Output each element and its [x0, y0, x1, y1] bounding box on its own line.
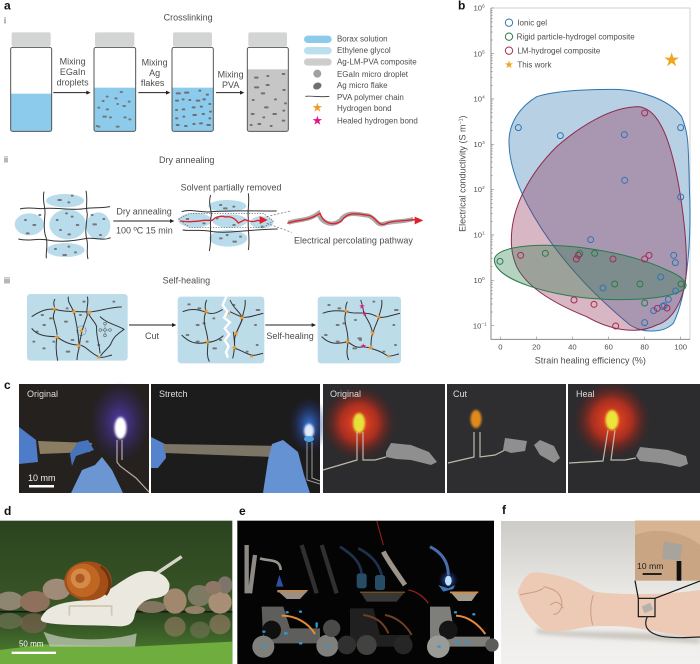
star: this work: [664, 52, 679, 66]
robot main with lit LED: [427, 547, 499, 658]
scale bar 50 mm: 50 mm: [19, 640, 44, 649]
y axis tick labels: 5: [482, 49, 485, 54]
region: ionic gel: [509, 89, 690, 331]
snail shell: [64, 561, 112, 601]
heading: Self-healing: Self-healing: [163, 276, 210, 286]
y axis tick labels: −1: [481, 321, 487, 326]
chart legend: LM-hydrogel composite: [517, 47, 601, 56]
annealed network diagram: [178, 193, 292, 251]
label: heal: Heal: [576, 389, 595, 399]
text: solvent partially removed: Solvent partially removed: [181, 182, 282, 192]
legend: [304, 35, 418, 126]
arrow: self-healing: [265, 323, 316, 341]
inset photo: [635, 521, 700, 581]
sub-label i: i: [4, 15, 6, 25]
y axis title: ): [457, 115, 467, 118]
y axis tick labels: 10: [474, 140, 482, 149]
panel: c photo heal: [568, 380, 700, 493]
chart legend: [505, 19, 635, 70]
arrow and label: mixing EGaIn droplets: EGaIn: [60, 67, 85, 77]
region: LM-hydrogel composite: [511, 107, 686, 330]
arrow and label: mixing PVA: [216, 69, 244, 95]
panel label e: e: [239, 504, 246, 518]
heading: Crosslinking: Crosslinking: [164, 13, 213, 23]
arrow and label: mixing PVA: PVA: [222, 80, 239, 90]
snail antenna: [157, 557, 182, 573]
chart legend: Ionic gel: [517, 19, 547, 28]
snail body: [41, 571, 169, 626]
x axis tick labels: 0: [498, 342, 502, 351]
y axis tick labels: 10: [474, 231, 482, 240]
panel: a-i crosslinking: [4, 13, 418, 131]
chart legend: This work: [517, 61, 552, 70]
data points: LM-hydrogel composite: [518, 110, 670, 329]
robot ghost 1: [247, 545, 340, 658]
inset photo: 10 mm: [637, 561, 663, 571]
x axis tick labels: 20: [532, 342, 541, 351]
y axis tick labels: 1: [482, 231, 485, 236]
arrow and label: mixing Ag flakes: Ag: [149, 68, 160, 78]
arrow: dry annealing 100 °C 15 min: [113, 207, 174, 235]
panel: c photo original red: [321, 384, 445, 493]
x axis tick labels: [498, 342, 687, 351]
arrow and label: mixing Ag flakes: flakes: [141, 78, 165, 88]
y axis tick labels: [473, 4, 487, 330]
panel: c photo stretch blue: [151, 384, 329, 493]
arrow: cut: [129, 323, 176, 341]
y axis tick labels: 4: [482, 95, 485, 100]
panel label d: d: [4, 504, 11, 518]
label: cut: Cut: [453, 389, 468, 399]
y axis tick labels: 10: [474, 185, 482, 194]
data points: ionic gel: [515, 125, 684, 326]
arrow and label: mixing PVA: Mixing: [218, 69, 244, 79]
panel: b scatter chart: [457, 4, 690, 366]
y axis tick labels: 10: [474, 95, 482, 104]
robot ghosts 2 and 3: [302, 545, 413, 655]
panel label f: f: [502, 503, 507, 517]
y axis tick labels: 10: [474, 276, 482, 285]
y axis tick labels: 6: [482, 4, 485, 9]
arrow: dry annealing 100 °C 15 min: Dry annealing: [116, 207, 172, 217]
panel: f wrist photo: [501, 521, 700, 664]
vial 3 with droplets and flakes: [172, 32, 213, 131]
grass background: [0, 521, 232, 664]
x axis tick labels: 40: [568, 342, 577, 351]
arrow: cut: Cut: [145, 331, 159, 341]
arrow and label: mixing EGaIn droplets: droplets: [57, 77, 89, 87]
panel label c: c: [4, 378, 11, 392]
legend: composite: Ag-LM-PVA composite: [337, 57, 417, 66]
text: electrical percolating pathway: Electrical percolating pathway: [294, 236, 413, 246]
vial 1 borax: [11, 32, 52, 131]
label: original: Original: [330, 389, 361, 399]
hydrogel panel cut: [178, 296, 264, 363]
legend: borax solution: Borax solution: [337, 35, 388, 44]
x axis title: Strain healing efficiency (%): [535, 356, 646, 366]
y axis tick labels: 10: [474, 4, 482, 13]
x axis tick labels: 80: [640, 342, 649, 351]
strip on snail: [69, 606, 112, 616]
arrow and label: mixing Ag flakes: [138, 57, 170, 95]
zoom box and lines: [635, 581, 700, 617]
legend: ethylene glycol: Ethylene glycol: [337, 46, 391, 55]
scale bar 10 mm: 10 mm: [28, 473, 56, 483]
sub-label ii: ii: [4, 155, 8, 165]
rocks: [0, 576, 232, 638]
chart legend: Rigid particle-hydrogel composite: [517, 33, 635, 42]
panel: e robot photo: [237, 521, 499, 664]
scale bar 50 mm: [12, 640, 56, 654]
arrow and label: mixing Ag flakes: Mixing: [142, 57, 168, 67]
plot frame and axes: [491, 8, 690, 339]
panel: a-iii self-healing: [4, 275, 401, 363]
hydrogel panel healed: [318, 297, 401, 363]
y axis tick labels: 0: [482, 276, 485, 281]
black background: [237, 521, 494, 664]
panel: a-ii dry annealing: [4, 155, 423, 259]
body reflection: [43, 632, 137, 647]
arm and fist: [518, 572, 700, 638]
data points: rigid particle composite: [497, 250, 684, 306]
legend: hydrogen bond: Hydrogen bond: [337, 104, 392, 113]
x axis tick labels: 100: [674, 342, 687, 351]
electrical percolating pathway: [287, 213, 423, 224]
robot main arm: [377, 521, 428, 603]
y axis title: Electrical conductivity (S m: [457, 125, 467, 232]
label: stretch: Stretch: [159, 389, 188, 399]
water and foreground grass: [0, 612, 232, 664]
y axis tick labels: 3: [482, 140, 485, 145]
sub-label iii: iii: [4, 275, 10, 285]
arrow and label: mixing EGaIn droplets: [53, 56, 91, 95]
wire: [646, 617, 700, 638]
legend: PVA polymer chain: PVA polymer chain: [337, 93, 404, 102]
y axis tick labels: 10: [474, 49, 482, 58]
legend: Ag micro flake: Ag micro flake: [337, 81, 388, 90]
backdrop: [501, 521, 700, 664]
vial 4 composite: [247, 32, 288, 131]
region: rigid particle-hydrogel composite: [494, 245, 686, 300]
arrow: self-healing: Self-healing: [266, 331, 314, 341]
panel: c photo original blue: [19, 382, 150, 493]
vial 2 with droplets: [94, 32, 136, 131]
y axis tick labels: 10: [473, 321, 481, 330]
finger creases: [520, 587, 593, 625]
x axis tick labels: 60: [604, 342, 613, 351]
y axis title: −1: [458, 118, 464, 125]
arrow: dry annealing 100 °C 15 min: 100 ºC 15 min: [116, 225, 173, 235]
label: original: Original: [27, 389, 58, 399]
wrist sensor patch: [642, 603, 653, 613]
swollen network diagram: [15, 191, 111, 259]
legend: EGaIn micro droplet: EGaIn micro droplet: [337, 70, 409, 79]
hydrogel panel original: [27, 294, 128, 361]
y axis tick labels: 2: [482, 185, 485, 190]
arm shadow: [537, 628, 700, 643]
panel: c photo cut: [447, 384, 566, 493]
panel: d snail photo: [0, 521, 232, 664]
arrow and label: mixing EGaIn droplets: Mixing: [60, 56, 86, 66]
heading: Dry annealing: Dry annealing: [159, 155, 214, 165]
legend: healed hydrogen bond: Healed hydrogen bond: [337, 117, 418, 126]
